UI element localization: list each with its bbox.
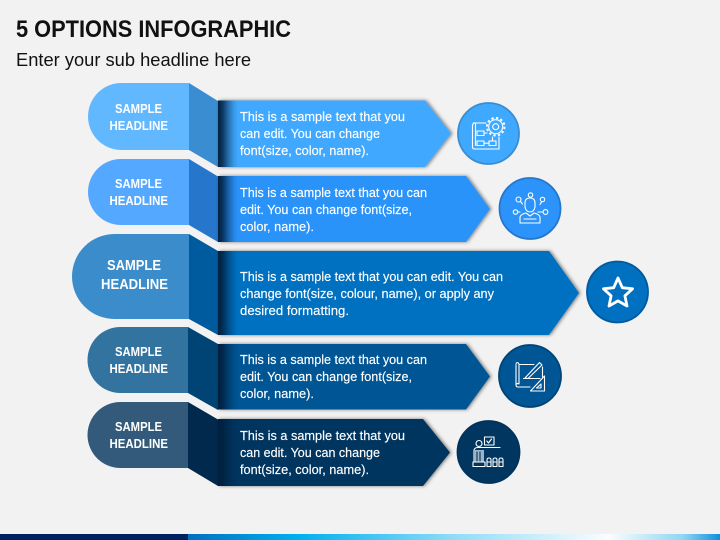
option 4 headline pill: SAMPLE [115,344,162,359]
option 1 fold [189,83,218,167]
option 4 arrow band: edit. You can change font(size, [240,369,412,384]
sub headline: Enter your sub headline here [16,50,251,70]
option 5 [88,402,520,486]
option 3 headline pill [72,234,189,319]
option 4 [88,327,561,410]
option 3 headline pill: SAMPLE [107,257,161,274]
option 2 arrow band: This is a sample text that you can [240,185,427,200]
option 2 arrow band: edit. You can change font(size, [240,202,412,217]
option 2 headline pill [88,159,189,225]
option 2 arrow band: color, name). [240,219,314,234]
option 1 arrow band: This is a sample text that you [240,109,405,124]
footer bar [0,534,720,540]
option 1 [88,83,519,167]
option 2 icon: person with ideas [500,178,560,239]
option 5 headline pill [88,402,188,468]
option 1 arrow band: font(size, color, name). [240,143,369,158]
option 5 arrow band: This is a sample text that you [240,428,405,443]
option 5 fold [188,402,218,486]
option 3 arrow band: change font(size, colour, name), or apply any [240,286,494,301]
option 3 fold [189,234,218,335]
option 1 headline pill: HEADLINE [110,118,168,133]
option 1 headline pill [88,83,189,150]
option 5 arrow band: can edit. You can change [240,445,380,460]
option 1 icon: blueprint and gear [458,103,519,164]
option 3 icon: star [587,262,648,322]
option 3 [72,234,648,335]
option 4 fold [188,327,218,410]
option 5 arrow band: font(size, color, name). [240,462,369,477]
option 5 headline pill: HEADLINE [110,436,168,451]
option 4 headline pill: HEADLINE [110,361,168,376]
option 4 headline pill [88,327,188,393]
option 5 icon: presenter and audience [458,421,520,483]
option 2 headline pill: HEADLINE [110,193,168,208]
option 5 arrow band [218,419,450,486]
option 1 arrow band [218,100,451,167]
option 2 fold [189,159,218,242]
option 4 icon: drafting pencil and set square [499,345,561,407]
option 1 arrow band: can edit. You can change [240,126,380,141]
option 5 headline pill: SAMPLE [115,419,162,434]
option 2 headline pill: SAMPLE [115,176,162,191]
option 3 arrow band [218,251,579,335]
option 3 headline pill: HEADLINE [101,276,168,293]
option 4 arrow band [218,344,490,410]
title: 5 OPTIONS INFOGRAPHIC [16,16,291,43]
option 4 arrow band: color, name). [240,386,314,401]
option 3 arrow band: This is a sample text that you can edit. You can [240,269,503,284]
option 2 [88,159,560,242]
option 1 headline pill: SAMPLE [115,101,162,116]
option 2 arrow band [218,176,490,242]
option 4 arrow band: This is a sample text that you can [240,352,427,367]
option 3 arrow band: desired formatting. [240,303,349,318]
